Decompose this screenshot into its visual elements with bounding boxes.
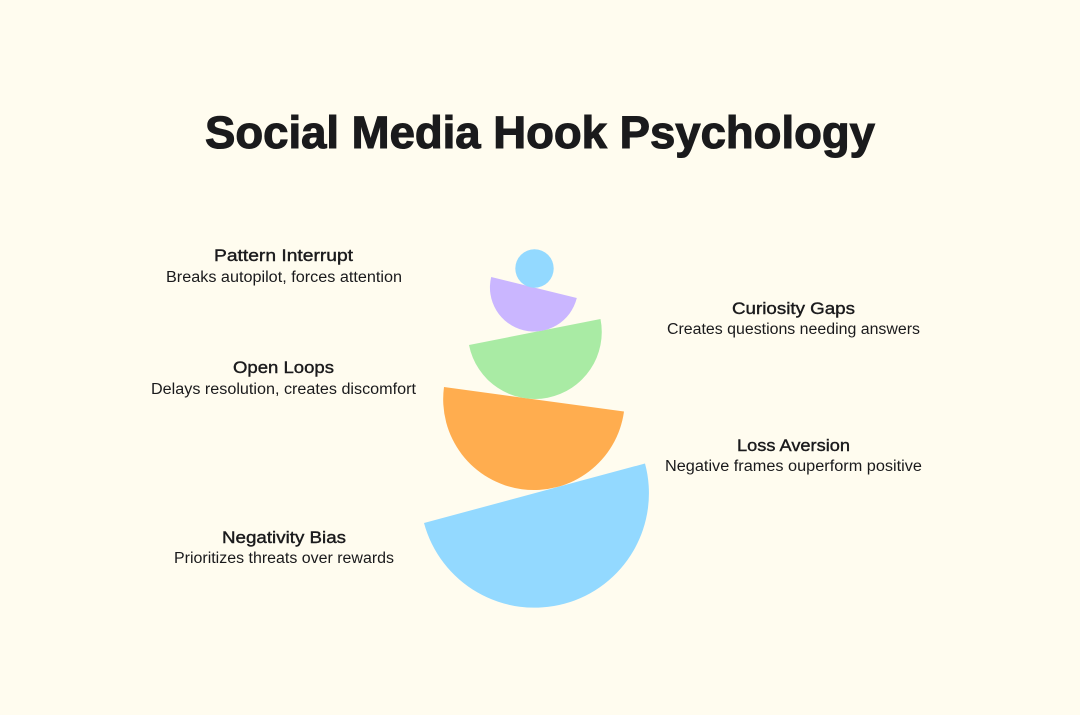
label: Curiosity Gaps — [667, 299, 920, 338]
heading: Negativity Bias — [222, 528, 346, 547]
label: Open Loops — [151, 358, 417, 398]
shape: blue half circle (Negativity Bias) — [424, 464, 649, 608]
label: Loss Aversion — [665, 436, 922, 475]
heading: Pattern Interrupt — [214, 246, 353, 265]
heading: Curiosity Gaps — [732, 299, 855, 318]
description: Breaks autopilot, forces attention — [166, 269, 402, 286]
heading: Loss Aversion — [737, 436, 850, 455]
stacked balancing shapes — [424, 249, 649, 608]
description: Negative frames ouperform positive — [665, 458, 922, 475]
shape: green half circle (Open Loops) — [469, 319, 602, 399]
label: Pattern Interrupt — [166, 246, 402, 286]
shape: orange half circle (Loss Aversion) — [443, 387, 624, 490]
heading: Open Loops — [233, 358, 334, 377]
label: Negativity Bias — [174, 528, 394, 567]
description: Delays resolution, creates discomfort — [151, 381, 417, 398]
title: Social Media Hook Psychology — [205, 107, 875, 158]
shape: purple half circle (Curiosity Gaps) — [490, 277, 577, 332]
description: Prioritizes threats over rewards — [174, 550, 394, 567]
shape: blue circle (Pattern Interrupt) — [515, 249, 554, 288]
description: Creates questions needing answers — [667, 321, 920, 338]
